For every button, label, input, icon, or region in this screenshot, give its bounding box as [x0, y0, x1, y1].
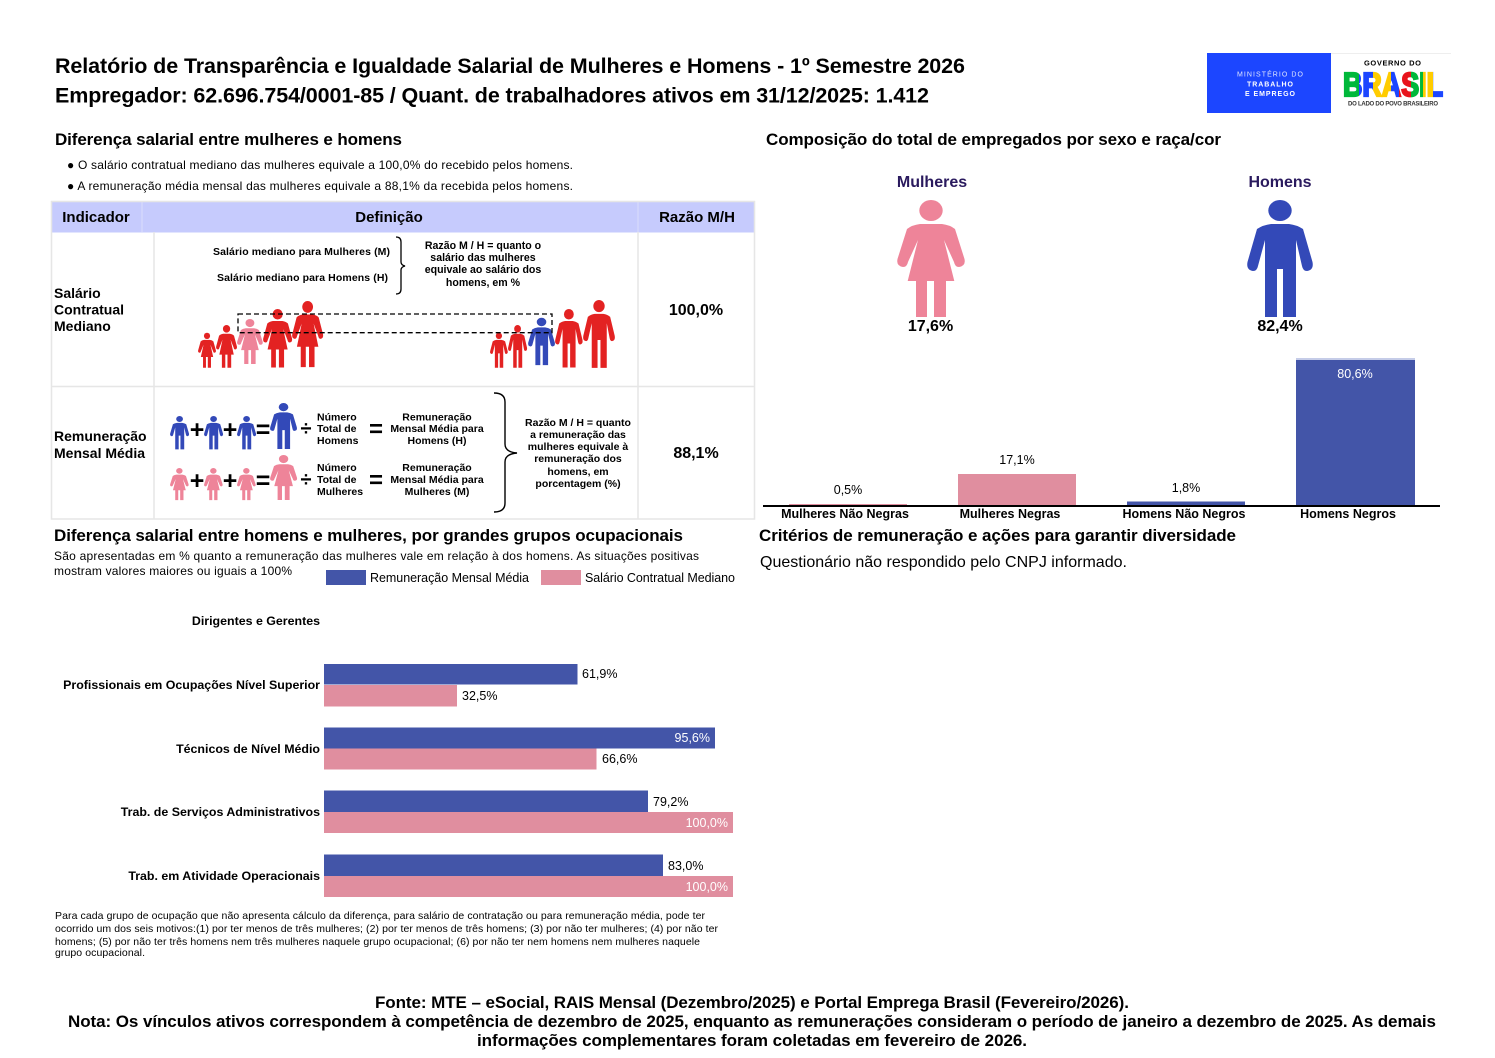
brace and explanation: Razão M / H = quanto: [525, 417, 631, 429]
group: Profissionais: Profissionais em Ocupações Nível Superior: [63, 678, 320, 692]
definition text: Razão M / H = quanto o: [425, 240, 542, 252]
formula: homens: +: [223, 416, 237, 444]
formula: homens: Homens: [317, 435, 359, 447]
footer: fonte e nota: Fonte: MTE – eSocial, RAIS Mensal (Dezembro/2025) e Portal Emprega Brasil (Fevereiro/2026).: [375, 993, 1129, 1012]
brace and explanation: remuneração dos: [534, 453, 622, 465]
heading: critérios: Critérios de remuneração e ações para garantir diversidade: [759, 526, 1236, 545]
row label: [54, 428, 147, 461]
definition text: Salário mediano para Homens (H): [217, 272, 388, 284]
brace and explanation: homens, em: [547, 466, 609, 478]
formula: mulheres: Remuneração: [402, 462, 472, 474]
definition text: [213, 237, 542, 294]
definition text: salário das mulheres: [430, 252, 536, 264]
group: Atividade Operacionais: Trab. em Atividade Operacionais: [128, 869, 320, 883]
row: remuneração mensal média: [54, 393, 719, 512]
footnote: grupo ocupacional.: [55, 947, 145, 959]
title: Relatório de Transparência e Igualdade Salarial de Mulheres e Homens - 1º Semestre 2026: [55, 54, 965, 78]
footnote: homens; (5) por não ter três homens nem três mulheres naquele grupo ocupacional; (6) por não ter nem homens nem mulheres naquele: [55, 936, 700, 948]
logo: Governo do Brasil: [1331, 53, 1451, 108]
formula: homens: =: [369, 416, 383, 443]
definition text: homens, em %: [446, 277, 521, 289]
footer: fonte e nota: Nota: Os vínculos ativos correspondem à competência de dezembro de 2025, enquanto as remunerações consideram o período de janeiro a dezembro de 2025. As demais: [68, 1012, 1436, 1031]
group: Técnicos: Técnicos de Nível Médio: [176, 742, 320, 756]
bar chart: composição por raça/cor: Homens Não Negros: [1123, 507, 1246, 521]
text block: explicação do gráfico: [54, 549, 699, 578]
table header: Indicador: [62, 209, 130, 226]
group: Serviços Administrativos: Trab. de Serviços Administrativos: [121, 805, 320, 819]
table header: Razão M/H: [659, 209, 735, 226]
bar chart: composição por raça/cor: [763, 358, 1440, 521]
title: [55, 54, 965, 108]
formula: mulheres: +: [223, 467, 237, 495]
table header: Definição: [355, 209, 423, 226]
text block: resumo da diferença salarial: ● A remuneração média mensal das mulheres equivale a 88,1% da recebida pelos homens.: [67, 179, 573, 193]
formula: mulheres: ÷: [301, 469, 312, 491]
brace and explanation: a remuneração das: [530, 429, 626, 441]
formula: homens: +: [190, 416, 204, 444]
row label: Contratual: [54, 302, 124, 318]
formula: homens: Total de: [317, 423, 357, 435]
bar chart: composição por raça/cor: Homens Negros: [1300, 507, 1396, 521]
group: Técnicos: 95,6%: [675, 731, 710, 745]
value: 88,1%: [673, 445, 719, 462]
formula: mulheres: Número: [317, 462, 357, 474]
panel: homens: [1247, 174, 1313, 335]
formula: homens: =: [256, 416, 270, 444]
formula: mulheres: Total de: [317, 474, 357, 486]
row label: Salário: [54, 285, 101, 301]
definition text: equivale ao salário dos: [425, 264, 541, 276]
row label: Mensal Média: [54, 445, 145, 461]
formula: mulheres: =: [256, 467, 270, 495]
icons: women median group: [198, 301, 323, 368]
heading: composição: Composição do total de empregados por sexo e raça/cor: [766, 130, 1221, 149]
brace and explanation: mulheres equivale à: [528, 441, 628, 453]
footnote: ocorrido um dos seis motivos:(1) por ter menos de três mulheres; (2) por ter menos de três homens; (3) por não ter mulheres; (4) por não ter: [55, 923, 718, 935]
formula: mulheres: =: [369, 467, 383, 494]
group: Profissionais: [63, 664, 617, 706]
footer: fonte e nota: informações complementares foram coletadas em fevereiro de 2026.: [477, 1031, 1027, 1050]
formula: homens: [170, 403, 484, 449]
footnote: Para cada grupo de ocupação que não apresenta cálculo da diferença, para salário de contratação ou para remuneração média, pode ter: [55, 910, 706, 922]
panel: homens: 82,4%: [1257, 318, 1303, 335]
group: Atividade Operacionais: 83,0%: [668, 859, 703, 873]
bar chart: composição por raça/cor: 80,6%: [1337, 367, 1373, 381]
bar chart: grupos ocupacionais: [63, 614, 733, 897]
heading: diferença salarial: Diferença salarial entre mulheres e homens: [55, 130, 402, 149]
panel: homens: Homens: [1248, 174, 1312, 191]
footer: fonte e nota: [68, 993, 1436, 1050]
formula: mulheres: Mensal Média para: [390, 474, 484, 486]
logo: Ministério do Trabalho e Emprego: MINISTÉRIO DO: [1237, 70, 1304, 78]
formula: homens: Remuneração: [402, 412, 472, 424]
panel: tabela de indicadores: [52, 202, 754, 519]
legend: Remuneração Mensal Média: [370, 571, 529, 585]
icon: woman: [897, 200, 965, 317]
footnote: [55, 910, 718, 959]
panel: mulheres: 17,6%: [908, 318, 953, 335]
formula: homens: Número: [317, 412, 357, 424]
text block: explicação do gráfico: mostram valores maiores ou iguais a 100%: [54, 564, 292, 578]
logo: Ministério do Trabalho e Emprego: [1207, 53, 1331, 113]
heading: grupos ocupacionais: Diferença salarial entre homens e mulheres, por grandes grupos ocupacionais: [54, 526, 683, 545]
text block: resumo da diferença salarial: [67, 158, 573, 193]
logo: Ministério do Trabalho e Emprego: E EMPREGO: [1245, 91, 1296, 98]
formula: mulheres: [170, 455, 484, 500]
value: 100,0%: [669, 302, 723, 319]
group: Atividade Operacionais: 100,0%: [686, 880, 728, 894]
formula: mulheres: Mulheres: [317, 486, 363, 498]
table header: [52, 202, 754, 232]
row label: [54, 285, 124, 334]
group: Profissionais: 61,9%: [582, 667, 617, 681]
group: Profissionais: 32,5%: [462, 689, 497, 703]
row label: Remuneração: [54, 428, 147, 444]
logo: Ministério do Trabalho e Emprego: TRABALHO: [1247, 82, 1294, 88]
text block: questionário: Questionário não respondido pelo CNPJ informado.: [760, 554, 1127, 571]
logo: Governo do Brasil: DO LADO DO POVO BRASILEIRO: [1348, 102, 1438, 108]
bar chart: composição por raça/cor: Mulheres Não Negras: [781, 507, 909, 521]
row label: Mediano: [54, 318, 111, 334]
icons: men median group: [490, 300, 615, 368]
group: Dirigentes e Gerentes: Dirigentes e Gerentes: [192, 614, 320, 628]
group: Técnicos: [176, 728, 715, 770]
logo: Governo do Brasil: BRASIL: [1343, 66, 1443, 103]
legend: Salário Contratual Mediano: [585, 571, 735, 585]
group: Atividade Operacionais: [128, 854, 733, 897]
row: salário contratual mediano: [54, 237, 723, 368]
formula: homens: Mensal Média para: [390, 423, 484, 435]
formula: homens: ÷: [301, 418, 312, 440]
bar chart: composição por raça/cor: 1,8%: [1172, 481, 1200, 495]
group: Técnicos: 66,6%: [602, 752, 637, 766]
formula: homens: Homens (H): [408, 435, 466, 447]
title: Empregador: 62.696.754/0001-85 / Quant. de trabalhadores ativos em 31/12/2025: 1.412: [55, 84, 929, 108]
formula: mulheres: Mulheres (M): [405, 486, 469, 498]
icon: man: [1247, 200, 1313, 317]
brace and explanation: porcentagem (%): [535, 478, 621, 490]
group: Serviços Administrativos: [121, 790, 733, 833]
group: Serviços Administrativos: 79,2%: [653, 795, 688, 809]
bar chart: composição por raça/cor: 17,1%: [999, 453, 1035, 467]
group: Serviços Administrativos: 100,0%: [686, 816, 728, 830]
definition text: Salário mediano para Mulheres (M): [213, 246, 390, 258]
brace and explanation: [494, 393, 631, 512]
panel: mulheres: [897, 174, 967, 335]
text block: resumo da diferença salarial: ● O salário contratual mediano das mulheres equivale a 100,0% do recebido pelos homens.: [67, 158, 573, 172]
bar chart: composição por raça/cor: 0,5%: [834, 483, 862, 497]
bar chart: composição por raça/cor: Mulheres Negras: [960, 507, 1060, 521]
legend: [326, 570, 735, 585]
panel: mulheres: Mulheres: [897, 174, 967, 191]
text block: explicação do gráfico: São apresentadas em % quanto a remuneração das mulheres vale em relação à dos homens. As situações positivas: [54, 549, 699, 563]
logo: Governo do Brasil: GOVERNO DO: [1364, 58, 1421, 68]
formula: mulheres: +: [190, 467, 204, 495]
